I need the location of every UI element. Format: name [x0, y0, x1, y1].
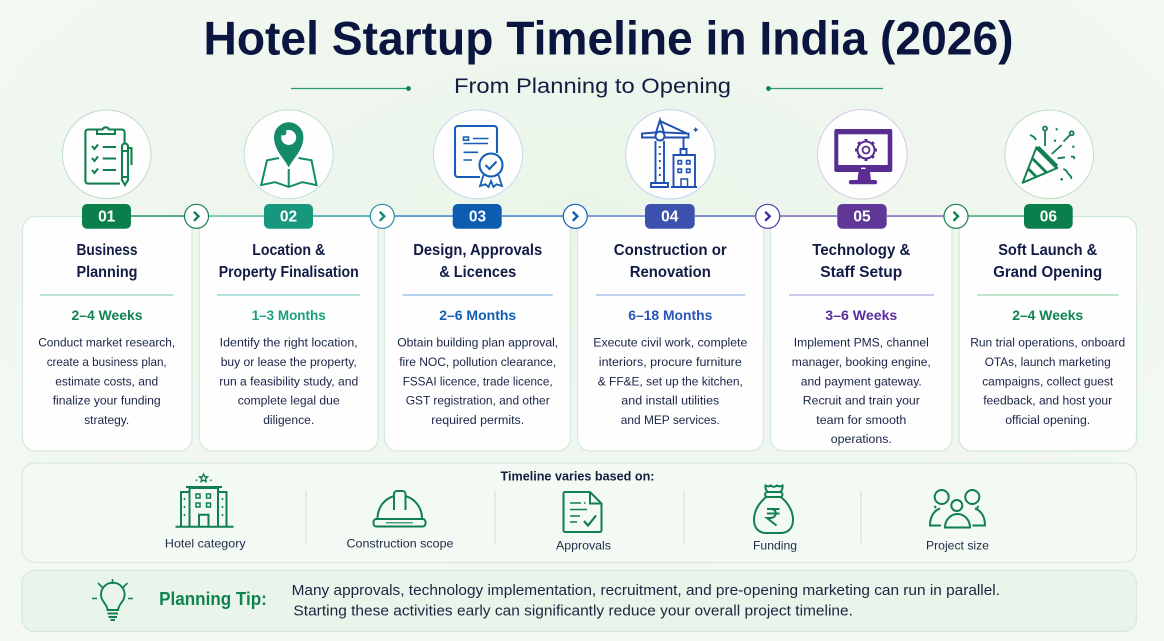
panel: step 2 card: complete legal due [238, 394, 340, 408]
icon: map with location pin [244, 110, 333, 199]
arrow 3 to 4 [563, 204, 587, 228]
factor: funding: Funding [753, 538, 797, 552]
panel: step 4 card: Execute civil work, complete [593, 336, 747, 350]
panel: step 2 card: Identify the right location, [220, 336, 358, 350]
panel: step 5 card: Implement PMS, channel [794, 336, 929, 350]
icon: party popper [1005, 110, 1094, 199]
panel: step 5 card: manager, booking engine, [792, 355, 931, 369]
step badge 04 [645, 204, 695, 229]
icon: construction crane and building [626, 110, 715, 199]
arrow 4 to 5 [756, 204, 780, 228]
panel: step 4 card: Construction or [614, 242, 727, 259]
panel: step 5 card: Technology & [812, 242, 911, 259]
timeline connector [131, 215, 1024, 217]
step badge 03: 03 [469, 208, 486, 226]
step badge 02 [264, 204, 313, 229]
panel: step 3 card: FSSAI licence, trade licence, [403, 374, 553, 388]
panel: step 6 card: Soft Launch & [998, 242, 1098, 259]
step badge 02: 02 [280, 208, 297, 226]
step badge 03 [453, 204, 502, 229]
panel: step 6 card: OTAs, launch marketing [985, 355, 1111, 369]
panel: step 5 card: and payment gateway. [801, 374, 922, 388]
panel: step 1 card: Business [76, 242, 138, 259]
panel: step 5 card: Recruit and train your [803, 394, 920, 408]
panel: timeline varies based on [22, 463, 1136, 562]
panel: planning tip: Starting these activities early can significantly reduce your overall project timeline. [293, 604, 853, 620]
panel: step 2 card: diligence. [263, 413, 314, 427]
icon: monitor with gear [818, 110, 907, 199]
panel: step 3 card: fire NOC, pollution clearance, [399, 355, 556, 369]
panel: step 4 card: & FF&E, set up the kitchen, [598, 374, 743, 388]
panel: step 4 card: and install utilities [621, 394, 719, 408]
panel: step 5 card: team for smooth [816, 413, 906, 427]
panel: step 1 card: Conduct market research, [38, 336, 175, 350]
panel: step 5 card: 3–6 Weeks [825, 307, 898, 323]
panel: step 1 card: 2–4 Weeks [72, 307, 143, 323]
panel: step 3 card: GST registration, and other [406, 394, 550, 408]
panel: step 6 card: Grand Opening [993, 264, 1102, 281]
step badge 01 [82, 204, 131, 229]
panel: step 3 card: Design, Approvals [413, 242, 542, 259]
subtitle: From Planning to Opening [454, 75, 731, 98]
step badge 01: 01 [98, 208, 116, 226]
factor: project size: Project size [926, 538, 989, 552]
panel: planning tip [22, 570, 1136, 632]
panel: step 3 card: 2–6 Months [439, 307, 516, 323]
panel: step 3 card: & Licences [439, 264, 516, 281]
factor: construction scope: Construction scope [346, 537, 454, 551]
title: Hotel Startup Timeline in India (2026) [204, 12, 1014, 64]
panel: step 6 card: feedback, and host your [983, 394, 1112, 408]
panel: step 2 card: run a feasibility study, and [219, 374, 358, 388]
panel: step 4 card: Renovation [630, 264, 711, 281]
factor: construction scope [346, 491, 454, 551]
arrow 2 to 3 [370, 204, 394, 228]
step badge 05: 05 [853, 208, 871, 226]
panel: step 3 card [384, 216, 570, 451]
panel: step 4 card: interiors, procure furniture [599, 355, 742, 369]
panel: step 1 card [22, 216, 192, 451]
panel: step 3 card: required permits. [431, 413, 524, 427]
step badge 06 [1024, 204, 1073, 229]
panel: step 4 card: 6–18 Months [628, 307, 712, 323]
panel: planning tip: Many approvals, technology implementation, recruitment, and pre-opening marketing can run in parallel. [292, 583, 1000, 599]
panel: step 6 card: 2–4 Weeks [1012, 307, 1083, 323]
arrow 5 to 6 [944, 204, 968, 228]
panel: planning tip: Planning Tip: [159, 589, 267, 609]
panel: step 1 card: estimate costs, and [55, 374, 158, 388]
panel: step 1 card: Planning [76, 264, 138, 281]
icon: clipboard checklist [62, 110, 151, 199]
icon: certificate with seal [433, 110, 523, 199]
panel: step 5 card [770, 216, 952, 451]
panel: step 2 card: Location & [252, 242, 326, 259]
factor: approvals [556, 492, 611, 552]
factor: hotel category [165, 474, 246, 551]
step badge 04: 04 [661, 208, 679, 226]
panel: timeline varies based on: Timeline varies based on: [500, 470, 654, 484]
panel: step 2 card: 1–3 Months [252, 307, 326, 323]
panel: step 2 card [200, 216, 378, 451]
panel: step 6 card: campaigns, collect guest [982, 374, 1114, 388]
step badge 06: 06 [1040, 208, 1057, 226]
icon: light bulb [92, 579, 133, 620]
panel: step 6 card [959, 216, 1136, 451]
panel: step 1 card: create a business plan, [47, 355, 167, 369]
panel: step 4 card [578, 216, 764, 451]
panel: step 2 card: buy or lease the property, [221, 355, 357, 369]
panel: step 5 card: operations. [831, 432, 892, 446]
factor: hotel category: Hotel category [165, 537, 246, 551]
panel: step 4 card: and MEP services. [621, 413, 720, 427]
subtitle [291, 75, 883, 98]
panel: step 1 card: strategy. [84, 413, 129, 427]
panel: step 6 card: official opening. [1005, 413, 1090, 427]
panel: step 3 card: Obtain building plan approval, [397, 336, 558, 350]
panel: step 5 card: Staff Setup [820, 264, 903, 281]
panel: step 2 card: Property Finalisation [219, 264, 359, 281]
factor: funding [753, 486, 797, 552]
panel: step 1 card: finalize your funding [53, 394, 161, 408]
arrow 1 to 2 [184, 204, 208, 228]
factor: approvals: Approvals [556, 538, 611, 552]
panel: step 6 card: Run trial operations, onboard [970, 336, 1125, 350]
step badge 05 [837, 204, 887, 229]
factor: project size [926, 490, 989, 552]
